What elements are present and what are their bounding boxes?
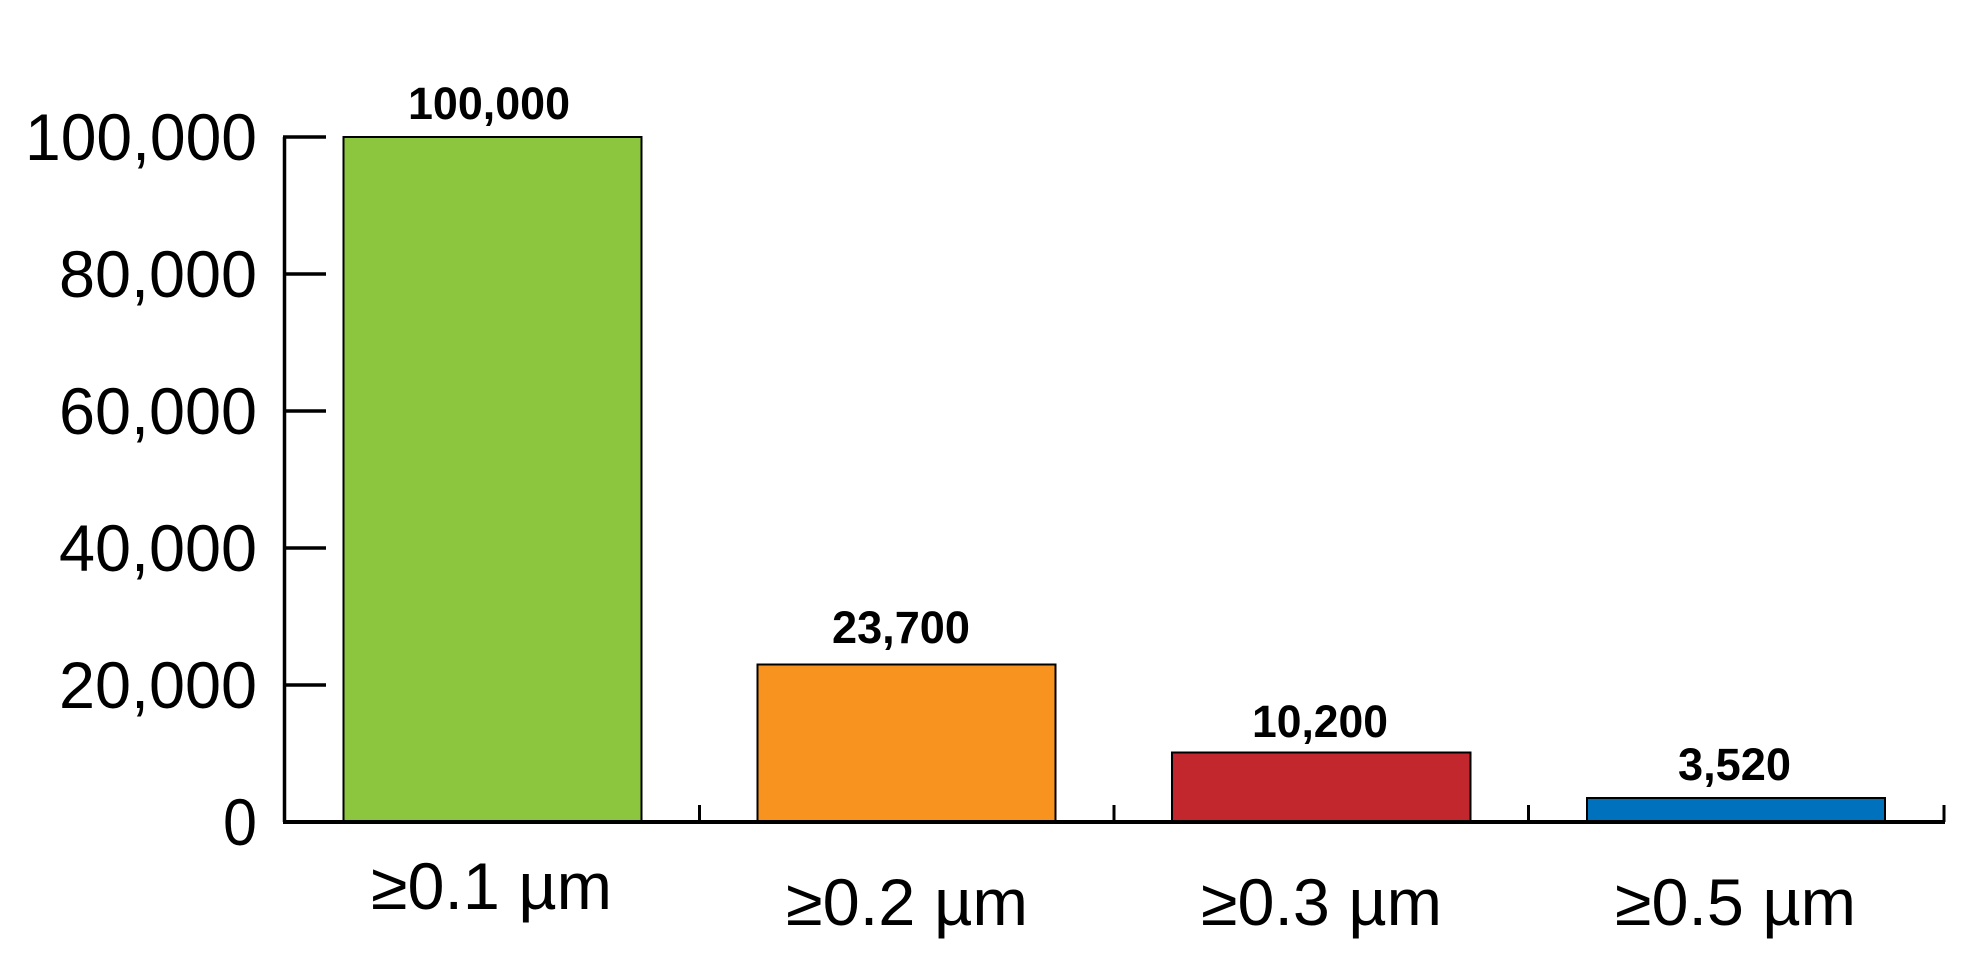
value labels: 10,200 <box>1252 696 1388 747</box>
bar: 0.3 um <box>1172 752 1470 822</box>
value labels <box>408 78 1791 790</box>
y axis labels: 60,000 <box>59 374 257 448</box>
category labels: ≥0.5 µm <box>1615 865 1856 939</box>
value labels: 23,700 <box>832 602 970 653</box>
value labels: 100,000 <box>408 78 570 129</box>
category labels: ≥0.1 µm <box>371 849 612 923</box>
bar: 0.2 um <box>758 664 1056 822</box>
y axis labels: 100,000 <box>25 100 257 174</box>
y axis labels <box>25 100 257 859</box>
bar: 0.1 um <box>344 137 642 822</box>
y axis labels: 20,000 <box>59 648 257 722</box>
value labels: 3,520 <box>1678 739 1791 790</box>
y axis labels: 80,000 <box>59 237 257 311</box>
y axis labels: 40,000 <box>59 511 257 585</box>
x axis with ticks <box>283 805 1945 822</box>
y axis with ticks <box>283 137 326 822</box>
category labels <box>371 849 1856 939</box>
category labels: ≥0.3 µm <box>1201 865 1442 939</box>
bar: 0.5 um <box>1587 798 1885 822</box>
category labels: ≥0.2 µm <box>786 865 1028 939</box>
y axis labels: 0 <box>223 785 257 859</box>
